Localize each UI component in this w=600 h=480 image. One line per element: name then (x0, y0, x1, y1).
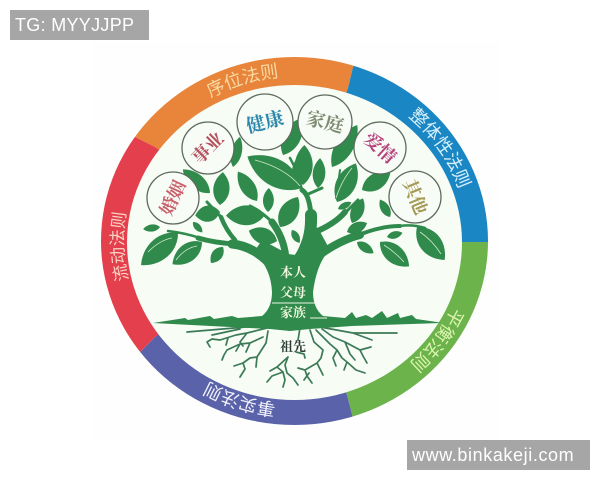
trunk label: 父母: 父母 (280, 285, 306, 300)
fruit circle: 婚姻: 婚姻 (156, 177, 190, 219)
fruit circle: 健康: 健康 (244, 106, 286, 138)
fruit circle: 爱情 (354, 122, 406, 174)
fruit circle: 其他: 其他 (399, 177, 431, 217)
fruit circle: 家庭 (298, 95, 352, 149)
fruit circle: 其他 (389, 171, 441, 223)
tree leaves (134, 114, 453, 273)
leaf highlights (148, 160, 441, 262)
trunk label: 家族: 家族 (280, 305, 306, 320)
ring: six coloured law segments (101, 57, 488, 425)
trunk label: 本人: 本人 (280, 265, 306, 280)
ring label: 流动法则: 流动法则 (109, 212, 129, 282)
watermark tag: TG (10, 10, 149, 40)
fruit circle: 爱情: 爱情 (359, 128, 400, 167)
fruit circle: 健康 (237, 94, 293, 150)
watermark tag: TG: TG: MYYJJPP (15, 15, 134, 35)
ring label: 事实法则: 事实法则 (202, 382, 275, 418)
fruit circle: 家庭: 家庭 (304, 106, 346, 138)
tree roots (187, 325, 397, 387)
watermark tag: website: www.binkakeji.com (412, 445, 574, 465)
fruit circle: 婚姻 (147, 172, 199, 224)
fruit circle: 事业: 事业 (187, 127, 228, 168)
tree trunk and ground (153, 225, 441, 331)
fruit circle: 事业 (182, 122, 234, 174)
root label: 祖先: 祖先 (280, 339, 306, 354)
tree branches (168, 158, 425, 262)
watermark tag: website (407, 440, 590, 470)
trunk divider lines (272, 303, 327, 318)
ring label: 整体性法则: 整体性法则 (408, 106, 472, 188)
ring label: 序位法则: 序位法则 (206, 62, 278, 98)
ring label: 平衡法则: 平衡法则 (410, 310, 464, 374)
